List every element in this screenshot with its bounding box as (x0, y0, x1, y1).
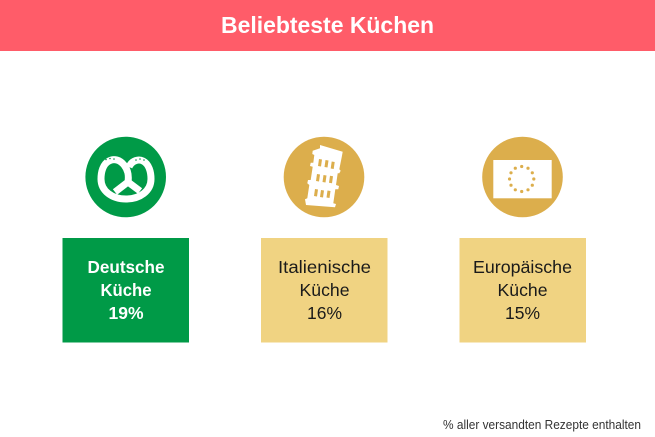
footnote: % aller versandten Rezepte enthalten (443, 418, 641, 432)
title: Beliebteste Küchen (221, 12, 434, 38)
label box: Italienische Küche 16%: Italienische (278, 257, 371, 277)
label box: Italienische Küche 16%: Küche (300, 280, 350, 300)
icon: pretzel (85, 137, 166, 217)
label box: Deutsche Küche 19%: Deutsche (88, 257, 165, 277)
icon: leaning tower of Pisa (284, 137, 364, 217)
label box: Europäische Küche 15% (460, 238, 586, 342)
label box: Europäische Küche 15%: Küche (498, 280, 548, 300)
label box: Italienische Küche 16% (261, 238, 388, 342)
icon: EU flag (482, 137, 563, 217)
label box: Deutsche Küche 19%: Küche (100, 280, 152, 300)
header banner (0, 0, 655, 51)
label box: Europäische Küche 15%: 15% (505, 303, 540, 323)
panel: Deutsche Küche (62, 137, 189, 342)
panel: Italienische Küche (261, 137, 388, 342)
panel: Europäische Küche (460, 137, 586, 342)
label box: Italienische Küche 16%: 16% (307, 303, 342, 323)
label box: Europäische Küche 15%: Europäische (473, 257, 572, 277)
label box: Deutsche Küche 19% (62, 238, 189, 342)
label box: Deutsche Küche 19%: 19% (108, 303, 144, 323)
